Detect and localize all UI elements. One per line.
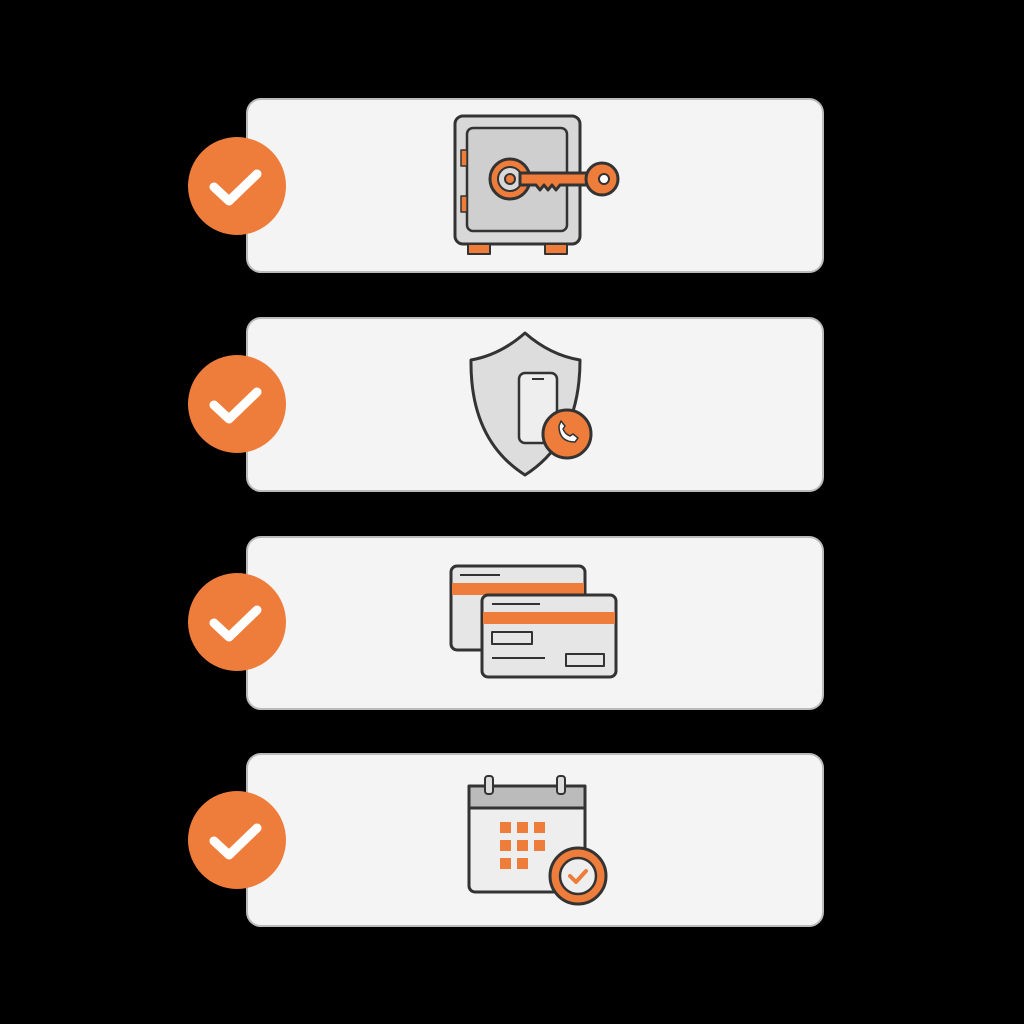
panel: card 2 shield xyxy=(247,318,823,491)
icon: check 3 xyxy=(188,573,286,671)
icon: safe with key xyxy=(455,116,618,254)
icon: check 1 xyxy=(188,137,286,235)
panel: card 1 safe xyxy=(247,99,823,272)
panel: card 4 calendar xyxy=(247,754,823,926)
icon: check 2 xyxy=(188,355,286,453)
panel: card 3 credit cards xyxy=(247,537,823,709)
icon: calendar with check xyxy=(469,776,606,904)
icon: check 4 xyxy=(188,791,286,889)
icon: credit cards xyxy=(451,566,616,677)
icon: shield with phone xyxy=(471,333,591,475)
